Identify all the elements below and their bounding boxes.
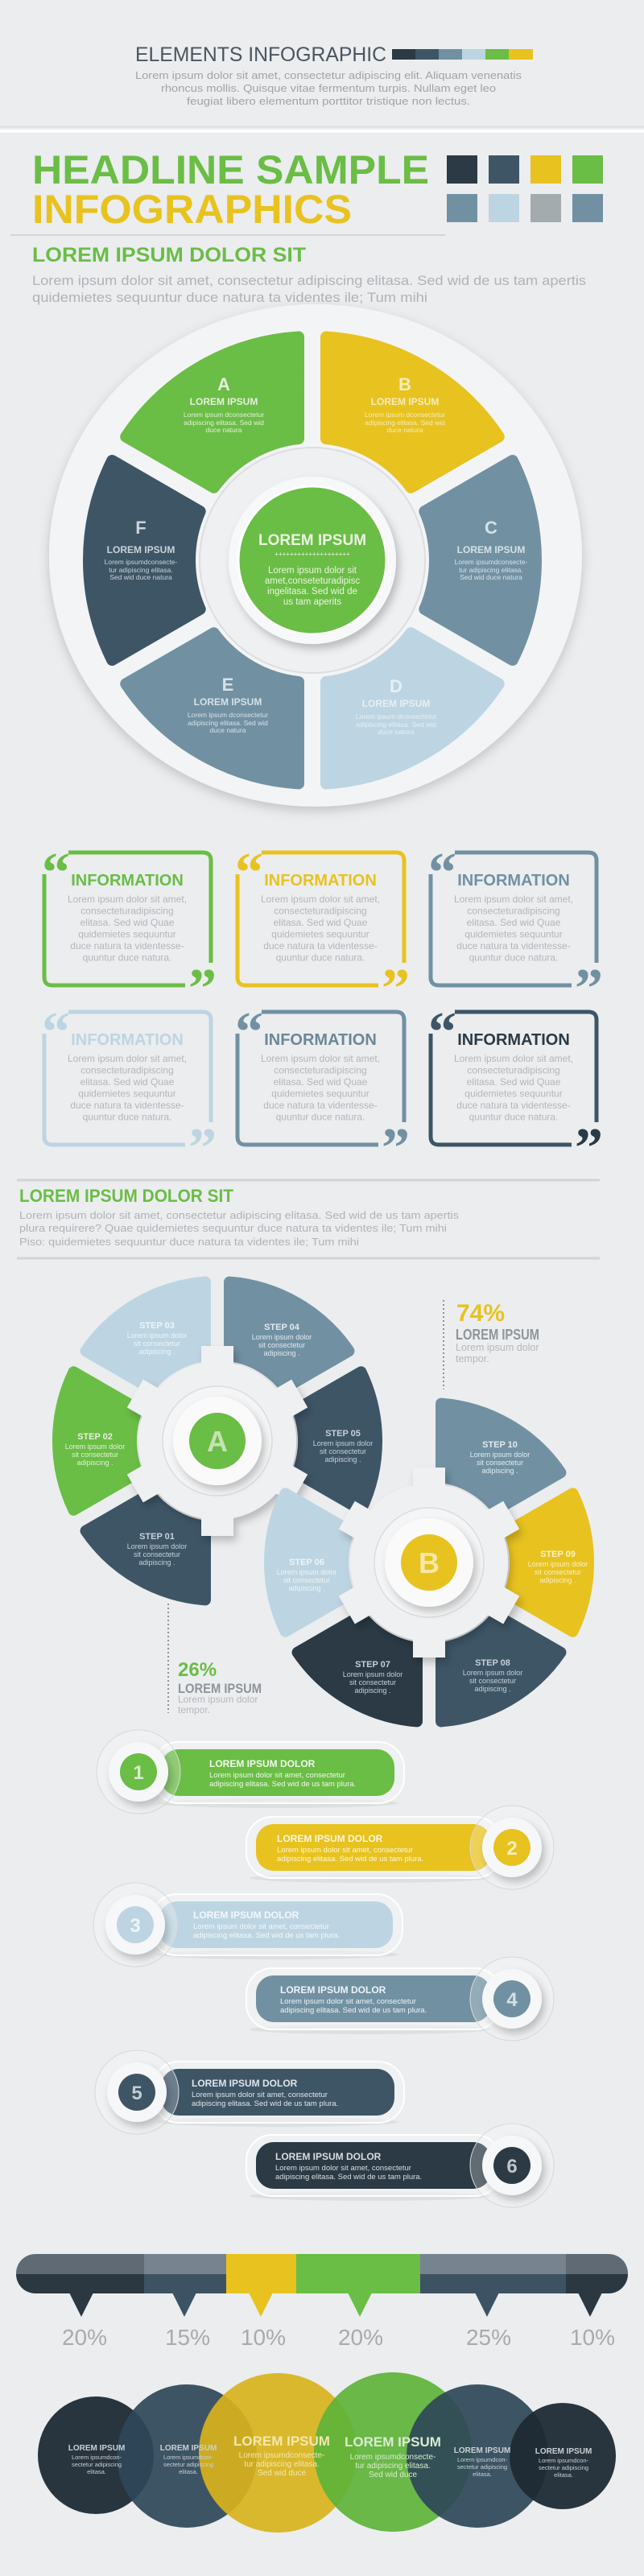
step 08: Lorem ipsum dolor bbox=[463, 1669, 522, 1677]
info box 5: Lorem ipsum dolor sit amet, bbox=[261, 1053, 380, 1064]
step 05: adipiscing . bbox=[324, 1455, 361, 1463]
circle text 2: elitasa. bbox=[179, 2468, 198, 2475]
gear diagram B bbox=[270, 1390, 588, 1735]
step 08 bbox=[463, 1658, 522, 1693]
info box 6: “ bbox=[428, 1001, 456, 1063]
list item 1: 1 bbox=[133, 1762, 144, 1784]
info box 4: consecteturadipiscing bbox=[80, 1064, 174, 1075]
percentage labels: 10% bbox=[570, 2325, 615, 2350]
list item 2: adipiscing elitasa. Sed wid de us tam plura. bbox=[277, 1855, 423, 1864]
info box 1: quidemietes sequuntur bbox=[78, 929, 176, 940]
info box 4: elitasa. Sed wid Quae bbox=[80, 1076, 175, 1088]
segment A: duce natura bbox=[206, 426, 242, 434]
list item 4: adipiscing elitasa. Sed wid de us tam plura. bbox=[280, 2006, 427, 2015]
info box 6: quuntur duce natura. bbox=[469, 1111, 558, 1122]
circle text 6: elitasa. bbox=[554, 2471, 573, 2479]
info box 1 bbox=[42, 842, 217, 1020]
header title: ELEMENTS INFOGRAPHIC bbox=[135, 43, 386, 66]
list item 2: LOREM IPSUM DOLOR bbox=[277, 1833, 383, 1844]
info box 5 bbox=[235, 1001, 410, 1179]
circle text 1: elitasa. bbox=[87, 2468, 106, 2475]
step 04 bbox=[252, 1323, 312, 1357]
info box 2: quidemietes sequuntur bbox=[271, 929, 369, 940]
list item 4: 4 bbox=[506, 1989, 518, 2011]
info box 3: Lorem ipsum dolor sit amet, bbox=[454, 894, 573, 905]
list item 6: 6 bbox=[506, 2156, 518, 2178]
info box 6: INFORMATION bbox=[457, 1031, 570, 1049]
info box 6: duce natura ta videntesse- bbox=[456, 1100, 571, 1111]
info box 5: “ bbox=[235, 1001, 263, 1063]
segment F: Lorem ipsumdconsecte- bbox=[105, 558, 178, 566]
info box 5: elitasa. Sed wid Quae bbox=[274, 1076, 368, 1088]
circle text 4: LOREM IPSUM bbox=[345, 2434, 441, 2450]
list item 1: adipiscing elitasa. Sed wid de us tam plura. bbox=[209, 1780, 356, 1789]
circle text 3: Lorem ipsumdconsecte- bbox=[239, 2451, 324, 2460]
list item 3 bbox=[93, 1883, 402, 1967]
circle text 1: LOREM IPSUM bbox=[68, 2444, 125, 2453]
header intro text: Lorem ipsum dolor sit amet, consectetur adipiscing elit. Aliquam venenatis bbox=[135, 70, 522, 81]
gear diagram A: A bbox=[207, 1425, 228, 1458]
segment F: Sed wid duce natura bbox=[109, 573, 172, 581]
circle text 1 bbox=[68, 2444, 125, 2475]
segment E: adipiscing elitasa. Sed wid bbox=[188, 719, 268, 727]
list item 2: 2 bbox=[506, 1838, 518, 1860]
header intro text bbox=[135, 70, 522, 107]
circle text 2: sectetur adipiscing bbox=[163, 2461, 213, 2468]
segment E: LOREM IPSUM bbox=[194, 696, 262, 708]
list item 5: adipiscing elitasa. Sed wid de us tam plura. bbox=[192, 2099, 338, 2108]
info box 4: INFORMATION bbox=[71, 1031, 184, 1049]
wheel centre text: amet,conseteturadipisc bbox=[265, 576, 360, 586]
callout 74%: tempor. bbox=[456, 1353, 489, 1364]
circle text 2: Lorem ipsumdcon- bbox=[163, 2454, 214, 2461]
info box 3: quuntur duce natura. bbox=[469, 952, 558, 963]
gear diagram B: B bbox=[419, 1546, 440, 1579]
circle text 5: LOREM IPSUM bbox=[454, 2446, 510, 2455]
circle text 4 bbox=[345, 2434, 441, 2479]
list item 4 bbox=[246, 1957, 554, 2041]
percentage labels: 15% bbox=[165, 2325, 210, 2350]
segment B: Lorem ipsum dconsectetur bbox=[365, 411, 445, 419]
gear diagram A bbox=[58, 1269, 377, 1613]
percentage labels: 25% bbox=[466, 2325, 511, 2350]
info box 6: quidemietes sequuntur bbox=[464, 1088, 563, 1100]
section intro text 2 bbox=[19, 1209, 460, 1248]
list item 5 bbox=[95, 2050, 404, 2134]
step 04: adipiscing . bbox=[263, 1349, 300, 1357]
step 05: STEP 05 bbox=[325, 1429, 361, 1439]
segment C: LOREM IPSUM bbox=[457, 544, 525, 555]
circle text 1: sectetur adipiscing bbox=[72, 2461, 122, 2468]
step 09: Lorem ipsum dolor bbox=[528, 1560, 588, 1568]
step 09 bbox=[528, 1550, 588, 1584]
callout 26% bbox=[168, 1604, 262, 1715]
info box 5: quidemietes sequuntur bbox=[271, 1088, 369, 1100]
info box 6: elitasa. Sed wid Quae bbox=[467, 1076, 561, 1088]
step 02: sit consectetur bbox=[72, 1451, 118, 1459]
step 06 bbox=[277, 1558, 336, 1592]
step 02: Lorem ipsum dolor bbox=[65, 1443, 125, 1451]
list item 3: LOREM IPSUM DOLOR bbox=[193, 1909, 299, 1921]
wheel centre text: us tam aperits bbox=[283, 597, 341, 607]
info box 3: quidemietes sequuntur bbox=[464, 929, 563, 940]
circle text 3: Sed wid duce bbox=[258, 2469, 306, 2478]
info box 5: ” bbox=[382, 1117, 410, 1179]
info box 4: quidemietes sequuntur bbox=[78, 1088, 176, 1100]
percentage labels: 20% bbox=[62, 2325, 107, 2350]
circle text 3: LOREM IPSUM bbox=[233, 2434, 330, 2449]
step 01 bbox=[127, 1532, 187, 1567]
info box 3: duce natura ta videntesse- bbox=[456, 940, 571, 952]
info box 4: quuntur duce natura. bbox=[83, 1111, 171, 1122]
segment E: Lorem ipsum dconsectetur bbox=[188, 711, 268, 719]
step 05 bbox=[313, 1429, 373, 1463]
step 07 bbox=[343, 1660, 402, 1695]
step 05: sit consectetur bbox=[320, 1447, 366, 1455]
step 08: sit consectetur bbox=[469, 1677, 516, 1685]
callout 26%: LOREM IPSUM bbox=[178, 1681, 262, 1696]
info box 3: elitasa. Sed wid Quae bbox=[467, 917, 561, 928]
segment F bbox=[105, 518, 178, 581]
percentage bar bbox=[16, 2254, 629, 2317]
step 04: sit consectetur bbox=[258, 1341, 305, 1349]
step 07: STEP 07 bbox=[355, 1660, 390, 1670]
step 03 bbox=[127, 1321, 187, 1356]
segment F: tur adipiscing elitasa. bbox=[109, 566, 173, 574]
header title bbox=[135, 43, 533, 66]
circle text 2 bbox=[160, 2444, 217, 2475]
info box 1: quuntur duce natura. bbox=[83, 952, 171, 963]
list item 2 bbox=[246, 1806, 554, 1889]
step 01: STEP 01 bbox=[139, 1532, 175, 1542]
segment A: adipiscing elitasa. Sed wid bbox=[184, 419, 264, 427]
segment F: LOREM IPSUM bbox=[107, 544, 175, 555]
section intro text 1 bbox=[32, 273, 586, 305]
info box 4 bbox=[42, 1001, 217, 1179]
segment E bbox=[188, 675, 268, 734]
info box 4: “ bbox=[42, 1001, 70, 1063]
list item 1: Lorem ipsum dolor sit amet, consectetur bbox=[209, 1771, 345, 1780]
wheel centre text: Lorem ipsum dolor sit bbox=[268, 566, 357, 576]
section intro text 1: Lorem ipsum dolor sit amet, consectetur adipiscing elitasa. Sed wid de us tam apertis bbox=[32, 273, 586, 288]
info box 6: Lorem ipsum dolor sit amet, bbox=[454, 1053, 573, 1064]
percentage labels bbox=[62, 2325, 615, 2350]
callout 74%: Lorem ipsum dolor bbox=[456, 1342, 539, 1353]
list item 2: Lorem ipsum dolor sit amet, consectetur bbox=[277, 1846, 413, 1855]
segment C bbox=[455, 518, 528, 581]
step 10: STEP 10 bbox=[482, 1440, 518, 1450]
segment B: LOREM IPSUM bbox=[371, 396, 439, 407]
list item 3: Lorem ipsum dolor sit amet, consectetur bbox=[193, 1922, 329, 1931]
info box 1: duce natura ta videntesse- bbox=[70, 940, 184, 952]
overlapping circles bbox=[38, 2372, 616, 2533]
info box 2: consecteturadipiscing bbox=[274, 905, 367, 916]
step 10: adipiscing . bbox=[481, 1467, 518, 1475]
info box 1: “ bbox=[42, 842, 70, 904]
list item 5: 5 bbox=[131, 2083, 142, 2104]
info box 2 bbox=[235, 842, 410, 1020]
list item 6 bbox=[246, 2124, 554, 2207]
callout 74%: 74% bbox=[456, 1300, 505, 1327]
section intro text 2: Lorem ipsum dolor sit amet, consectetur adipiscing elitasa. Sed wid de us tam apertis bbox=[19, 1209, 460, 1221]
segment C: Lorem ipsumdconsecte- bbox=[455, 558, 528, 566]
step 06: sit consectetur bbox=[283, 1576, 330, 1584]
circle text 4: Lorem ipsumdconsecte- bbox=[350, 2453, 436, 2462]
header intro text: feugiat libero elementum porttitor tristique non lectus. bbox=[187, 96, 470, 107]
info box 3 bbox=[428, 842, 603, 1020]
list item 4: LOREM IPSUM DOLOR bbox=[280, 1984, 386, 1996]
colour swatches bbox=[447, 155, 603, 222]
step 01: sit consectetur bbox=[134, 1550, 180, 1558]
circle text 5: sectetur adipiscing bbox=[457, 2463, 507, 2471]
header intro text: rhoncus mollis. Quisque vitae fermentum turpis. Nullam eget leo bbox=[161, 83, 496, 94]
callout 26%: Lorem ipsum dolor bbox=[178, 1694, 258, 1705]
info box 6 bbox=[428, 1001, 603, 1179]
step 06: Lorem ipsum dolor bbox=[277, 1568, 336, 1576]
section heading 1: LOREM IPSUM DOLOR SIT bbox=[32, 244, 306, 266]
info box 6: consecteturadipiscing bbox=[467, 1064, 560, 1075]
segment F: F bbox=[135, 518, 147, 538]
section intro text 2: Piso: quidemietes sequuntur duce natura ta videntes ile; Tum mihi bbox=[19, 1236, 359, 1248]
step 01: Lorem ipsum dolor bbox=[127, 1542, 187, 1550]
list item 5: LOREM IPSUM DOLOR bbox=[192, 2078, 298, 2089]
circle text 2: LOREM IPSUM bbox=[160, 2444, 217, 2453]
step 02 bbox=[65, 1432, 125, 1467]
circle text 6: Lorem ipsumdcon- bbox=[539, 2457, 589, 2464]
info box 3: ” bbox=[575, 958, 603, 1020]
circle text 6 bbox=[535, 2447, 592, 2479]
step 08: STEP 08 bbox=[475, 1658, 510, 1668]
segment D: LOREM IPSUM bbox=[362, 698, 430, 709]
circle text 5 bbox=[454, 2446, 510, 2478]
step 02: STEP 02 bbox=[77, 1432, 113, 1442]
info box 1: INFORMATION bbox=[71, 872, 184, 890]
step 09: adipiscing . bbox=[539, 1576, 576, 1584]
list item 6: Lorem ipsum dolor sit amet, consectetur bbox=[275, 2164, 411, 2173]
step 07: Lorem ipsum dolor bbox=[343, 1670, 402, 1678]
section intro text 1: quidemietes sequuntur duce natura ta videntes ile; Tum mihi bbox=[32, 290, 427, 305]
info box 2: duce natura ta videntesse- bbox=[263, 940, 378, 952]
segment A: LOREM IPSUM bbox=[190, 396, 258, 407]
list item 1 bbox=[97, 1730, 404, 1814]
step 07: sit consectetur bbox=[349, 1678, 396, 1686]
step 04: STEP 04 bbox=[264, 1323, 300, 1332]
step 10: Lorem ipsum dolor bbox=[470, 1451, 530, 1459]
circle text 5: elitasa. bbox=[473, 2471, 492, 2478]
segment A: A bbox=[217, 374, 230, 394]
list item 1: LOREM IPSUM DOLOR bbox=[209, 1758, 316, 1769]
segment D: adipiscing elitasa. Sed wid bbox=[356, 720, 436, 729]
circle text 6: sectetur adipiscing bbox=[539, 2464, 588, 2471]
info box 2: “ bbox=[235, 842, 263, 904]
step 08: adipiscing . bbox=[474, 1685, 511, 1693]
header colour strip bbox=[392, 49, 533, 60]
segment C: tur adipiscing elitasa. bbox=[459, 566, 523, 574]
list item 6: LOREM IPSUM DOLOR bbox=[275, 2151, 382, 2162]
segment B: adipiscing elitasa. Sed wid bbox=[365, 419, 445, 427]
info box 1: Lorem ipsum dolor sit amet, bbox=[68, 894, 187, 905]
percentage labels: 10% bbox=[241, 2325, 286, 2350]
segment B bbox=[365, 374, 445, 434]
list item 6: adipiscing elitasa. Sed wid de us tam plura. bbox=[275, 2173, 422, 2182]
step 04: Lorem ipsum dolor bbox=[252, 1333, 312, 1341]
segment D bbox=[356, 676, 436, 736]
circle text 6: LOREM IPSUM bbox=[535, 2447, 592, 2456]
step 03: Lorem ipsum dolor bbox=[127, 1331, 187, 1340]
step 06: STEP 06 bbox=[289, 1558, 324, 1567]
wheel centre text bbox=[258, 532, 366, 607]
step 10 bbox=[470, 1440, 530, 1475]
info box 5: duce natura ta videntesse- bbox=[263, 1100, 378, 1111]
segment D: Lorem ipsum dconsectetur bbox=[356, 712, 436, 720]
headline: HEADLINE SAMPLE bbox=[32, 147, 429, 192]
step 09: sit consectetur bbox=[535, 1568, 581, 1576]
segment C: C bbox=[485, 518, 497, 538]
segment C: Sed wid duce natura bbox=[460, 573, 522, 581]
info box 5: INFORMATION bbox=[264, 1031, 377, 1049]
info box 3: consecteturadipiscing bbox=[467, 905, 560, 916]
wheel centre text: ++++++++++++++++++++ bbox=[275, 551, 350, 558]
step 03: STEP 03 bbox=[139, 1321, 175, 1331]
info box 3: INFORMATION bbox=[457, 872, 570, 890]
segment B: B bbox=[398, 374, 411, 394]
info box 2: Lorem ipsum dolor sit amet, bbox=[261, 894, 380, 905]
circle text 3 bbox=[233, 2434, 330, 2478]
callout 26%: tempor. bbox=[178, 1704, 210, 1715]
info box 1: elitasa. Sed wid Quae bbox=[80, 917, 175, 928]
segment A: Lorem ipsum dconsectetur bbox=[184, 411, 264, 419]
step 05: Lorem ipsum dolor bbox=[313, 1439, 373, 1447]
step 03: adipiscing . bbox=[138, 1348, 175, 1356]
segment E: E bbox=[222, 675, 233, 695]
wheel centre text: LOREM IPSUM bbox=[258, 532, 366, 549]
segment A bbox=[184, 374, 264, 434]
info box 2: quuntur duce natura. bbox=[276, 952, 365, 963]
info box 2: ” bbox=[382, 958, 410, 1020]
step 06: adipiscing . bbox=[288, 1584, 325, 1592]
callout 74% bbox=[444, 1300, 539, 1389]
step 03: sit consectetur bbox=[134, 1340, 180, 1348]
segment D: D bbox=[390, 676, 402, 696]
segment D: duce natura bbox=[378, 728, 415, 736]
info box 5: quuntur duce natura. bbox=[276, 1111, 365, 1122]
circle text 4: tur adipiscing elitasa. bbox=[355, 2462, 431, 2471]
info box 2: INFORMATION bbox=[264, 872, 377, 890]
list item 5: Lorem ipsum dolor sit amet, consectetur bbox=[192, 2091, 328, 2099]
list item 4: Lorem ipsum dolor sit amet, consectetur bbox=[280, 1997, 416, 2006]
circle text 5: Lorem ipsumdcon- bbox=[457, 2456, 508, 2463]
wheel centre text: ingelitasa. Sed wid de bbox=[267, 587, 357, 597]
circle text 1: Lorem ipsumdcon- bbox=[72, 2454, 122, 2461]
headline bbox=[32, 147, 429, 232]
segment E: duce natura bbox=[210, 726, 246, 734]
circle text 3: tur adipiscing elitasa. bbox=[244, 2460, 320, 2469]
step 07: adipiscing . bbox=[354, 1686, 391, 1695]
info box 1: consecteturadipiscing bbox=[80, 905, 174, 916]
segment B: duce natura bbox=[387, 426, 423, 434]
wheel diagram bbox=[49, 304, 582, 807]
list item 3: 3 bbox=[130, 1915, 141, 1937]
step 01: adipiscing . bbox=[138, 1558, 175, 1567]
section intro text 2: plura requirere? Quae quidemietes sequuntur duce natura ta videntes ile; Tum mihi bbox=[19, 1222, 447, 1234]
step 09: STEP 09 bbox=[540, 1550, 576, 1559]
info box 1: ” bbox=[188, 958, 217, 1020]
info box 3: “ bbox=[428, 842, 456, 904]
list item 3: adipiscing elitasa. Sed wid de us tam plura. bbox=[193, 1931, 340, 1940]
info box 2: elitasa. Sed wid Quae bbox=[274, 917, 368, 928]
step 02: adipiscing . bbox=[76, 1459, 114, 1467]
info box 4: Lorem ipsum dolor sit amet, bbox=[68, 1053, 187, 1064]
info box 4: ” bbox=[188, 1117, 217, 1179]
section heading 2: LOREM IPSUM DOLOR SIT bbox=[19, 1186, 234, 1206]
info box 6: ” bbox=[575, 1117, 603, 1179]
percentage labels: 20% bbox=[338, 2325, 383, 2350]
circle text 4: Sed wid duce bbox=[369, 2471, 417, 2479]
info box 4: duce natura ta videntesse- bbox=[70, 1100, 184, 1111]
callout 26%: 26% bbox=[178, 1659, 217, 1681]
step 10: sit consectetur bbox=[477, 1459, 523, 1467]
headline: INFOGRAPHICS bbox=[32, 187, 352, 232]
callout 74%: LOREM IPSUM bbox=[456, 1327, 539, 1343]
info box 5: consecteturadipiscing bbox=[274, 1064, 367, 1075]
